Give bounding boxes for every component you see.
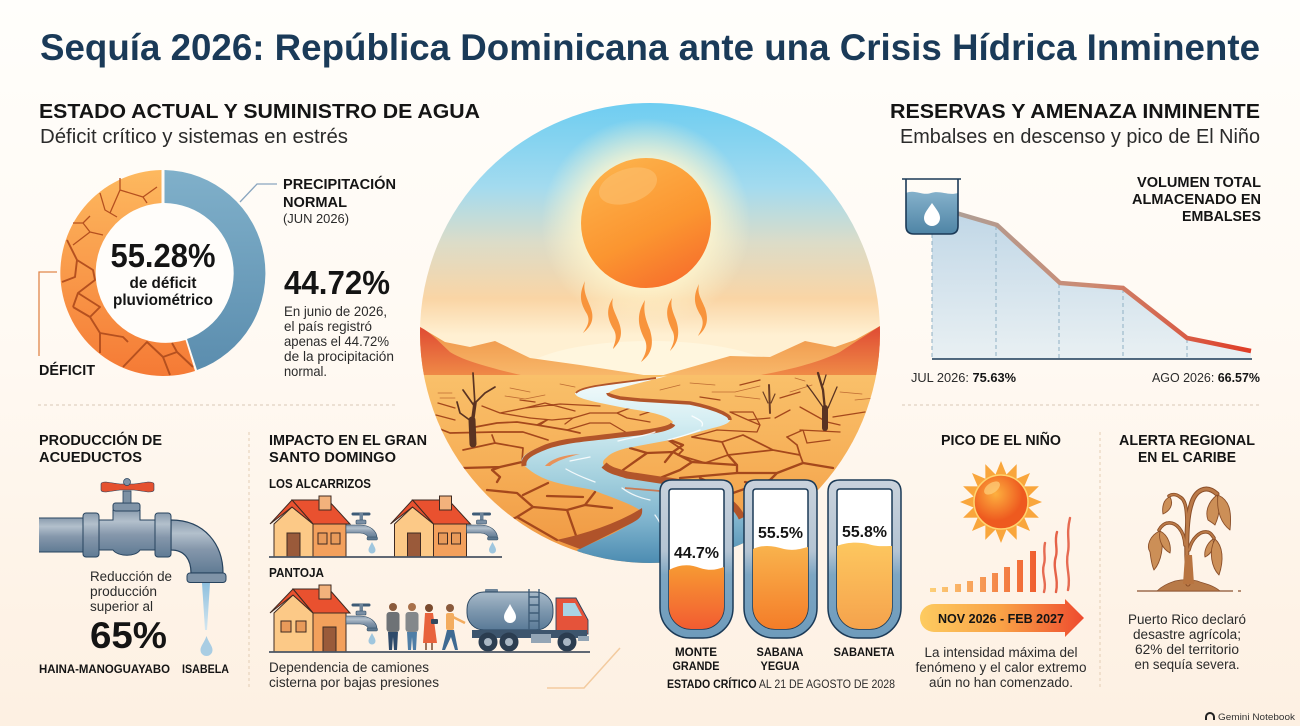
caption: dependencia: cisterna por bajas presiones: [269, 675, 439, 690]
icon: people queue: [386, 603, 465, 650]
line chart: volumen almacenado: [902, 179, 1252, 359]
gauge labels: YEGUA: [760, 659, 800, 673]
icon: house with tap 3: [270, 585, 378, 652]
sun: [548, 121, 744, 312]
trend line: [932, 206, 1251, 351]
label: déficit: DÉFICIT: [39, 362, 95, 379]
dead tree small: [763, 385, 775, 413]
area: [932, 206, 1251, 359]
dead tree right: [807, 373, 837, 428]
gauge: Sabaneta: [828, 480, 901, 638]
gauge labels: SABANETA: [834, 645, 895, 659]
donut centre value: 55.28%: [110, 237, 216, 274]
drop: [200, 636, 212, 656]
donut centre value: pluviométrico: [113, 292, 213, 309]
icon: pipe faucet: [39, 478, 226, 656]
gauge: Monte Grande: 44.7%: [674, 545, 719, 562]
text: intensidad máxima: La intensidad máxima del: [924, 645, 1078, 660]
gauge labels: [672, 645, 895, 673]
stat: reducción 65%: superior al: [90, 599, 153, 614]
cracks: [430, 378, 875, 547]
leader: déficit: [39, 272, 57, 356]
label: agosto: AGO 2026: 66.57%: [1152, 371, 1260, 385]
stat: 44.72%: 44.72%: [284, 264, 390, 301]
gauge labels: GRANDE: [672, 659, 720, 673]
heading: estado actual: ESTADO ACTUAL Y SUMINISTRO DE AGUA: [39, 100, 480, 123]
donut segment: precipitación: [164, 170, 265, 370]
caption: dependencia: Dependencia de camiones: [269, 660, 429, 675]
gauge: Sabana Yegua: 55.5%: [758, 525, 803, 542]
label: precipitación normal: PRECIPITACIÓN: [283, 175, 396, 193]
cracked ground: [420, 375, 880, 565]
label: precipitación normal: NORMAL: [283, 195, 347, 211]
gauge labels: SABANA: [756, 645, 804, 659]
gauge: Monte Grande: [660, 480, 733, 638]
water stream: [202, 583, 210, 630]
stat: 44.72%: [284, 264, 394, 379]
label: julio: JUL 2026: 75.63%: [911, 371, 1016, 385]
heading: producción: [39, 431, 162, 466]
icon: water tanker truck: [467, 589, 589, 651]
heading: impacto: [269, 433, 427, 466]
heading: impacto: SANTO DOMINGO: [269, 450, 396, 466]
label: precipitación normal: (JUN 2026): [283, 212, 349, 226]
heading: reservas: [890, 100, 1260, 148]
title: Sequía 2026: República Dominicana ante una Crisis Hídrica Inminente: [40, 27, 1260, 68]
stat: 44.72%: el país registró: [284, 318, 372, 334]
heading: reservas: RESERVAS Y AMENAZA INMINENTE: [890, 100, 1260, 123]
icon: wilted plant: [1137, 489, 1241, 591]
arrow: nov 2026 - feb 2027: NOV 2026 - FEB 2027: [938, 611, 1064, 626]
text: intensidad máxima: aún no han comenzado.: [929, 675, 1073, 690]
stat: 44.72%: normal.: [284, 363, 327, 379]
stat: reducción 65%: [90, 569, 172, 656]
stat: reducción 65%: Reducción de: [90, 569, 172, 584]
stat: reducción 65%: producción: [90, 584, 157, 599]
stat: 44.72%: de la procipitación: [284, 348, 394, 364]
icon: sun with rays: [960, 461, 1042, 543]
heading: pico de el niño: PICO DE EL NIÑO: [941, 431, 1061, 449]
label: los alcarrizos: LOS ALCARRIZOS: [269, 477, 371, 491]
gauge: Sabaneta: 55.8%: [842, 524, 887, 541]
text: puerto rico: Puerto Rico declaró: [1128, 612, 1246, 627]
text: intensidad máxima: [916, 645, 1086, 690]
heading: producción: PRODUCCIÓN DE: [39, 431, 162, 449]
river: [522, 376, 744, 563]
icon: house with tap 1: [270, 496, 378, 557]
dead tree left: [457, 373, 495, 444]
sky: [420, 103, 880, 383]
heat waves: [581, 281, 707, 362]
text: puerto rico: [1128, 612, 1246, 672]
label: precipitación normal: [283, 175, 396, 226]
label: volumen total: ALMACENADO EN: [1132, 192, 1261, 208]
stat: 44.72%: En junio de 2026,: [284, 303, 387, 319]
text: intensidad máxima: fenómeno y el calor extremo: [916, 660, 1086, 675]
label: haina: HAINA-MANOGUAYABO: [39, 662, 170, 676]
heading: alerta regional: ALERTA REGIONAL: [1119, 433, 1255, 449]
heading: estado actual: Déficit crítico y sistemas en estrés: [40, 126, 348, 148]
central illustration: drought landscape: [420, 103, 880, 570]
text: puerto rico: desastre agrícola;: [1133, 627, 1241, 642]
label: volumen total: [1132, 175, 1261, 225]
donut chart: [60, 170, 265, 376]
donut segment: déficit: [60, 170, 195, 376]
heading: impacto: IMPACTO EN EL GRAN: [269, 433, 427, 449]
chart: rising heat bars: [930, 518, 1070, 592]
text: puerto rico: en sequía severa.: [1134, 657, 1240, 672]
donut centre value: de déficit: [130, 275, 196, 292]
icon: house with tap 2: [390, 496, 498, 557]
label: isabela: ISABELA: [182, 662, 229, 676]
heading: producción: ACUEDUCTOS: [39, 450, 142, 466]
heading: estado actual: [39, 100, 480, 148]
caption: dependencia: [269, 660, 439, 690]
gauge: Sabana Yegua: [744, 480, 817, 638]
arrow: nov 2026 - feb 2027: [920, 599, 1084, 637]
leader: precipitación: [240, 184, 277, 202]
stat: 44.72%: apenas el 44.72%: [284, 333, 389, 349]
text: puerto rico: 62% del territorio: [1135, 642, 1239, 657]
heading: reservas: Embalses en descenso y pico de El Niño: [900, 126, 1260, 148]
river banks: [524, 378, 742, 518]
mountains: [420, 327, 650, 376]
caption: estado crítico: ESTADO CRÍTICO AL 21 DE AGOSTO DE 2028: [667, 678, 895, 691]
stat: reducción 65%: 65%: [90, 615, 167, 656]
gauge labels: MONTE: [675, 645, 717, 659]
donut centre value: [110, 237, 216, 309]
label: pantoja: PANTOJA: [269, 566, 324, 580]
heading: alerta regional: [1119, 433, 1255, 466]
label: volumen total: EMBALSES: [1182, 209, 1261, 225]
icon: beaker: [902, 179, 961, 234]
footer: gemini notebook: Gemini Notebook: [1218, 712, 1295, 723]
label: volumen total: VOLUMEN TOTAL: [1137, 175, 1261, 191]
heading: alerta regional: EN EL CARIBE: [1138, 450, 1236, 466]
